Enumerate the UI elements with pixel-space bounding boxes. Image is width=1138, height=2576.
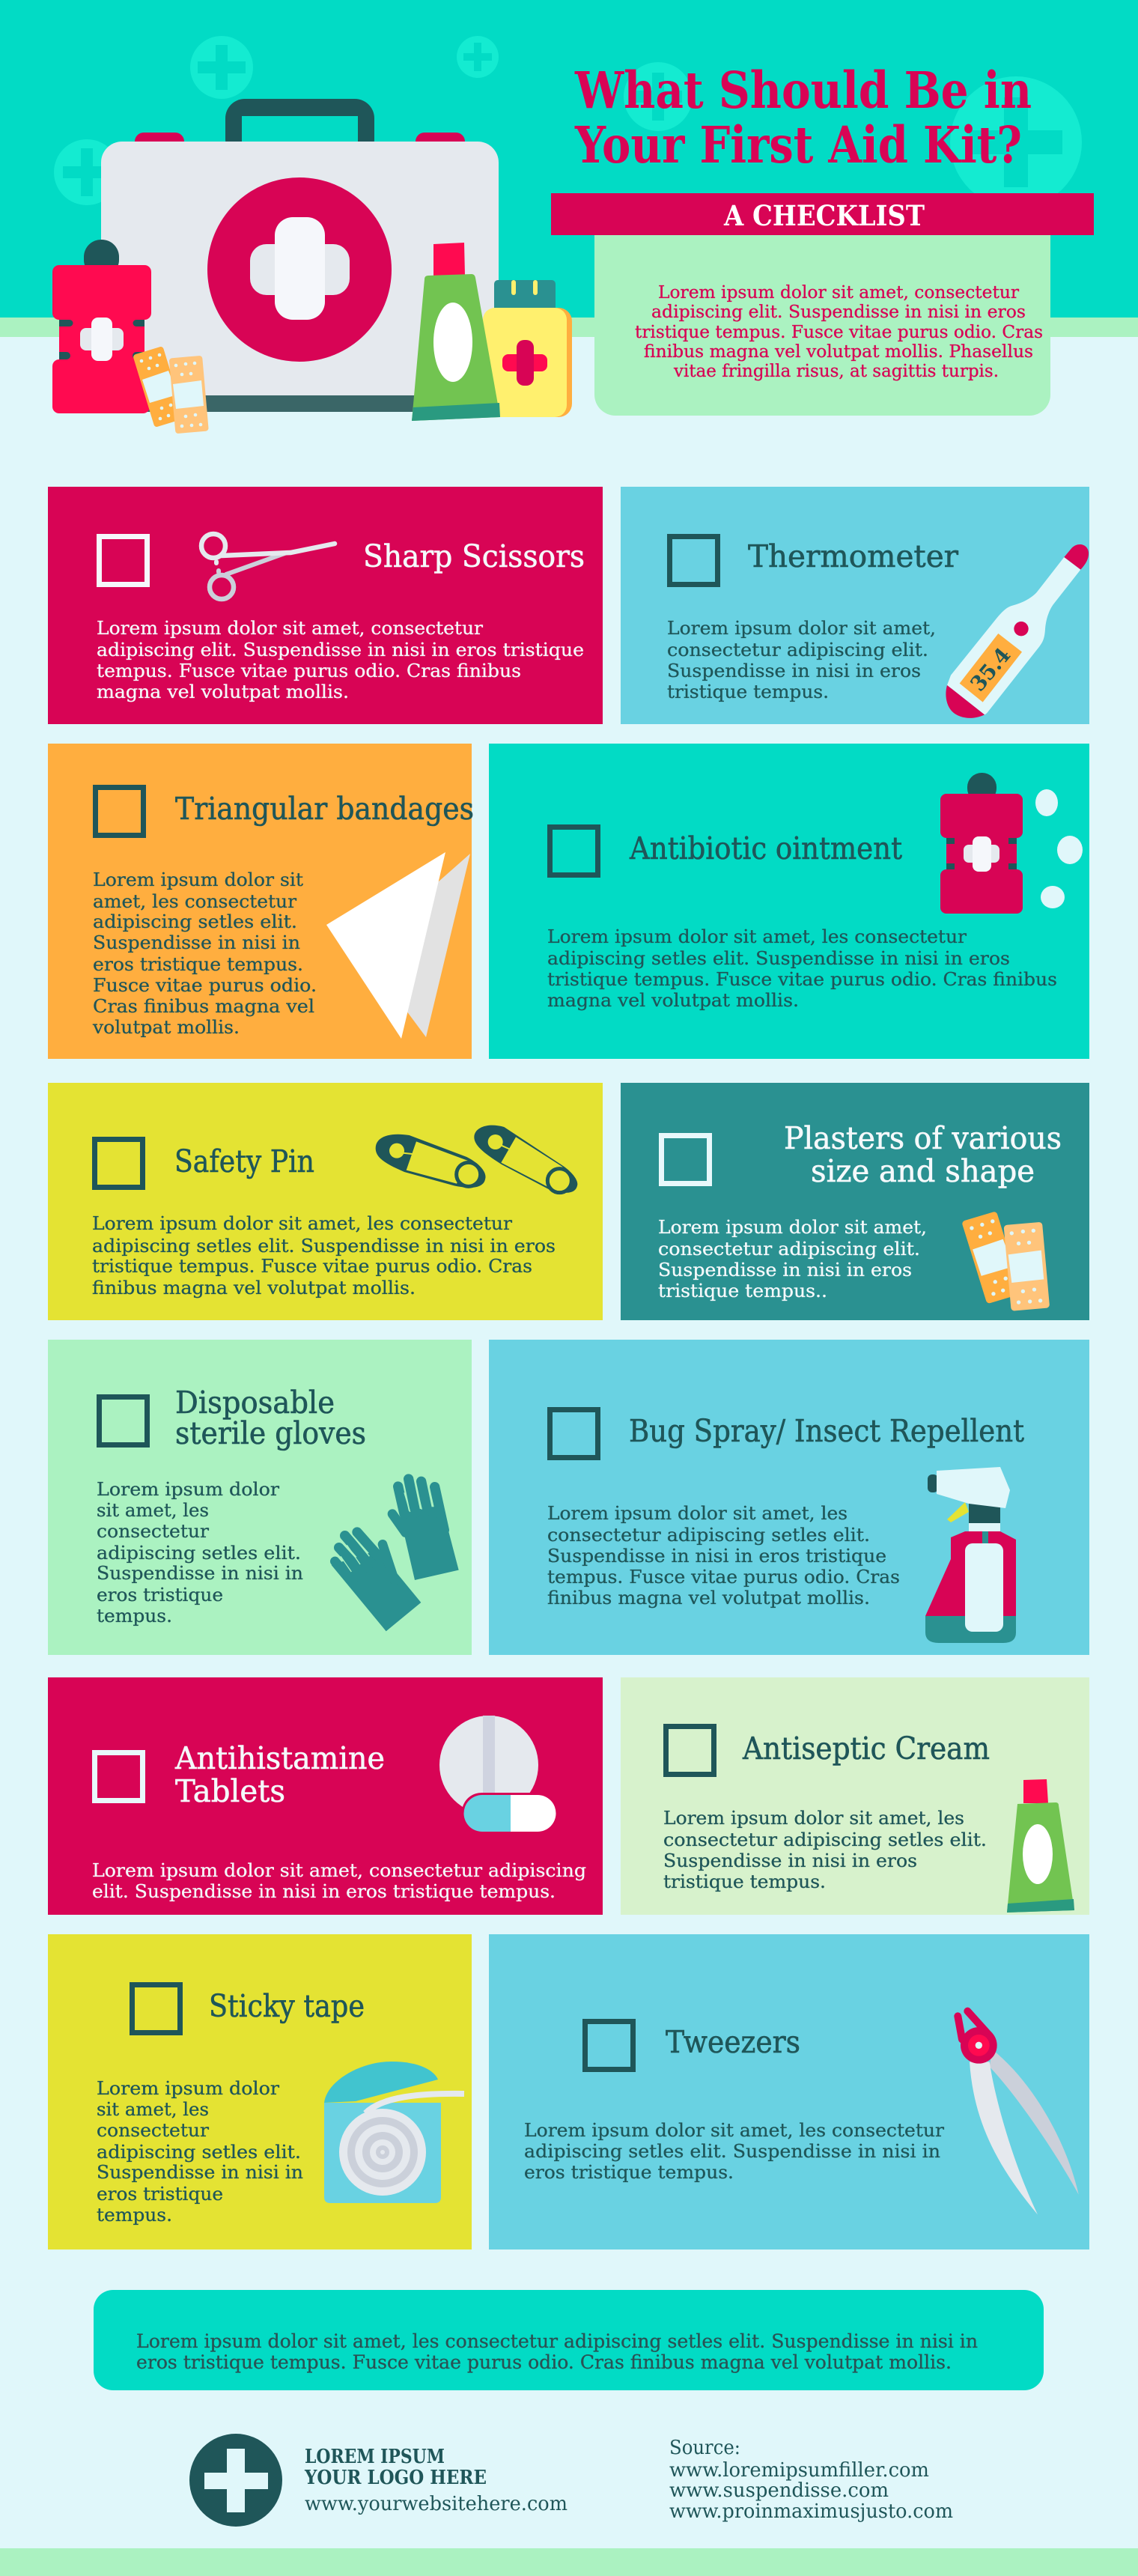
panel: antibiotic ointment: tristique tempus. Fusce vitae purus odio. Cras finibus [547,969,1057,990]
panel: sticky tape: tempus. [97,2205,172,2226]
icon: first aid kit [101,99,499,412]
panel: sticky tape: eros tristique [97,2184,223,2205]
icon: spray bottle [925,1467,1016,1643]
panel: safety pin: adipiscing setles elit. Suspendisse in nisi in eros [92,1236,556,1257]
closing text panel [94,2290,1044,2390]
panel: disposable gloves: adipiscing setles elit. [97,1543,301,1564]
panel: antiseptic cream: Lorem ipsum dolor sit amet, les [663,1808,964,1829]
icon: thermometer: 35.4 [965,643,1015,696]
checklist banner: A CHECKLIST [723,199,925,232]
panel: sharp scissors [48,487,603,724]
panel: sharp scissors: magna vel volutpat mollis. [97,681,349,702]
title: What Should Be in [574,61,1032,120]
icon: tweezers [958,2011,1079,2214]
icon: scissors [201,534,335,599]
panel: antihistamine tablets: Lorem ipsum dolor sit amet, consectetur adipiscing [92,1860,586,1881]
panel: triangular bandages: eros tristique tempus. [93,954,303,975]
intro text panel [594,235,1050,416]
panel: triangular bandages: Cras finibus magna vel [93,996,314,1017]
panel: sticky tape [48,1934,472,2250]
panel: sharp scissors: Lorem ipsum dolor sit amet, consectetur [97,618,484,639]
panel: plasters: Plasters of various [784,1120,1062,1156]
panel: disposable gloves: Suspendisse in nisi in [97,1563,303,1584]
panel: safety pin [48,1083,603,1320]
panel: antihistamine tablets: Antihistamine [174,1740,385,1776]
closing text panel: eros tristique tempus. Fusce vitae purus odio. Cras finibus magna vel volutpat mollis. [136,2351,952,2373]
panel: antiseptic cream: tristique tempus. [663,1871,826,1892]
panel: antiseptic cream [621,1677,1089,1915]
panel: plasters: size and shape [811,1153,1035,1189]
panel: plasters: Suspendisse in nisi in eros [658,1260,912,1281]
panel: disposable gloves: tempus. [97,1606,172,1626]
panel: disposable gloves: eros tristique [97,1585,223,1606]
panel: antiseptic cream: Suspendisse in nisi in eros [663,1850,917,1871]
logo text: www.yourwebsitehere.com [305,2493,568,2515]
intro text panel: finibus magna vel volutpat mollis. Phasellus [644,342,1033,362]
footer band [0,2548,1138,2576]
icon: antibiotic bottle and pills [940,773,1083,914]
panel: bug spray: finibus magna vel volutpat mollis. [547,1588,870,1609]
panel: disposable gloves: sit amet, les [97,1500,209,1521]
logo icon [189,2434,282,2527]
panel: bug spray: tempus. Fusce vitae purus odio. Cras [547,1567,900,1588]
panel: tweezers: Lorem ipsum dolor sit amet, les consectetur [524,2120,945,2141]
panel: sticky tape: sit amet, les [97,2099,209,2120]
intro text panel: vitae fringilla risus, at sagittis turpis. [673,362,999,381]
panel: sticky tape: consectetur [97,2120,210,2141]
panel: antiseptic cream: consectetur adipiscing setles elit. [663,1829,987,1850]
panel: antibiotic ointment: adipiscing setles elit. Suspendisse in nisi in eros [547,948,1010,969]
panel: disposable gloves: sterile gloves [175,1415,366,1451]
panel: triangular bandages: Triangular bandages [175,791,474,827]
decorative medical crosses [54,36,1082,208]
panel: triangular bandages: amet, les consectetur [93,891,297,912]
panel: triangular bandages: Lorem ipsum dolor sit [93,869,303,890]
panel: tweezers: adipiscing setles elit. Suspendisse in nisi in [524,2141,940,2162]
panel: triangular bandages [48,744,474,1059]
panel: antihistamine tablets: elit. Suspendisse in nisi in eros tristique tempus. [92,1881,556,1902]
panel: triangular bandages: volutpat mollis. [92,1017,240,1038]
panel: bug spray [489,1340,1089,1655]
checklist banner [551,193,1094,235]
panel: antiseptic cream: Antiseptic Cream [742,1731,990,1767]
panel: antihistamine tablets: Tablets [175,1773,285,1809]
panel: bug spray: Suspendisse in nisi in eros tristique [547,1546,886,1567]
panel: antibiotic ointment: Antibiotic ointment [629,830,902,866]
panel: safety pin: Safety Pin [174,1143,314,1179]
icon: triangular bandage [326,852,470,1039]
panel: disposable gloves [48,1340,472,1655]
panel: sharp scissors: tempus. Fusce vitae purus odio. Cras finibus [97,660,521,681]
icon: tape dispenser [324,2062,464,2203]
panel: tweezers: eros tristique tempus. [524,2162,734,2183]
intro text panel: adipiscing elit. Suspendisse in nisi in eros [651,303,1026,322]
panel: sticky tape: Lorem ipsum dolor [97,2078,280,2099]
icon: cream tube [1007,1779,1074,1913]
panel: triangular bandages: Fusce vitae purus odio. [93,975,317,996]
panel: thermometer: consectetur adipiscing elit. [667,640,928,660]
panel: tweezers: Tweezers [666,2024,800,2060]
panel: sharp scissors: Sharp Scissors [363,538,585,574]
panel: thermometer: tristique tempus. [667,681,829,702]
panel: antibiotic ointment [489,744,1089,1059]
panel: sticky tape: adipiscing setles elit. [97,2142,301,2163]
icon: tablet and capsule [439,1716,558,1834]
panel: tweezers [489,1934,1089,2250]
icon: red bottle [52,240,151,413]
panel: disposable gloves: Disposable [175,1385,335,1421]
title [574,61,1032,174]
panel: thermometer: Suspendisse in nisi in eros [667,660,921,681]
source text: www.proinmaximusjusto.com [669,2500,953,2523]
source text [669,2437,953,2523]
panel: thermometer [621,487,1089,724]
intro text panel: tristique tempus. Fusce vitae purus odio. Cras [635,323,1043,342]
icon: gloves [332,1479,459,1631]
logo text: LOREM IPSUM [305,2446,445,2468]
panel: bug spray: consectetur adipiscing setles elit. [547,1525,870,1546]
title: Your First Aid Kit? [574,115,1022,174]
panel: sticky tape: Sticky tape [209,1988,365,2024]
panel: disposable gloves: Lorem ipsum dolor [97,1479,280,1500]
panel: thermometer: Thermometer [748,538,958,574]
icon: safety pins [376,1126,577,1193]
panel: triangular bandages: adipiscing setles elit. [93,911,297,932]
header background [0,0,1138,337]
panel: triangular bandages: Suspendisse in nisi in [93,932,300,953]
panel: antibiotic ointment: Lorem ipsum dolor sit amet, les consectetur [547,926,967,947]
panel: thermometer: Lorem ipsum dolor sit amet, [667,618,936,639]
panel: bug spray: Lorem ipsum dolor sit amet, les [547,1503,848,1524]
icon: thermometer [946,544,1089,718]
logo text: YOUR LOGO HERE [304,2467,487,2489]
source text: www.loremipsumfiller.com [669,2459,929,2482]
logo text [304,2446,568,2515]
source text: www.suspendisse.com [669,2479,889,2502]
icon: plasters [133,346,209,434]
intro text panel: Lorem ipsum dolor sit amet, consectetur [658,283,1019,303]
panel: bug spray: Bug Spray/ Insect Repellent [629,1413,1024,1449]
panel: sharp scissors: adipiscing elit. Suspendisse in nisi in eros tristique [97,640,584,660]
panel: plasters: consectetur adipiscing elit. [658,1239,920,1260]
icon: plasters [961,1211,1050,1311]
icon: green ointment tube [412,243,500,421]
icon: yellow jar [483,280,572,417]
panel: disposable gloves: consectetur [97,1521,210,1542]
panel: antibiotic ointment: magna vel volutpat mollis. [547,990,799,1011]
panel: plasters: tristique tempus.. [658,1281,827,1301]
panel: plasters: Lorem ipsum dolor sit amet, [658,1217,927,1238]
panel: safety pin: tristique tempus. Fusce vitae purus odio. Cras [92,1256,532,1277]
panel: safety pin: finibus magna vel volutpat mollis. [92,1278,416,1298]
panel: safety pin: Lorem ipsum dolor sit amet, les consectetur [92,1213,513,1234]
panel: plasters [621,1083,1089,1320]
panel: antihistamine tablets [48,1677,603,1915]
closing text panel: Lorem ipsum dolor sit amet, les consectetur adipiscing setles elit. Suspendisse in nisi in [136,2330,978,2352]
source text: Source: [669,2437,740,2459]
panel: sticky tape: Suspendisse in nisi in [97,2162,303,2183]
